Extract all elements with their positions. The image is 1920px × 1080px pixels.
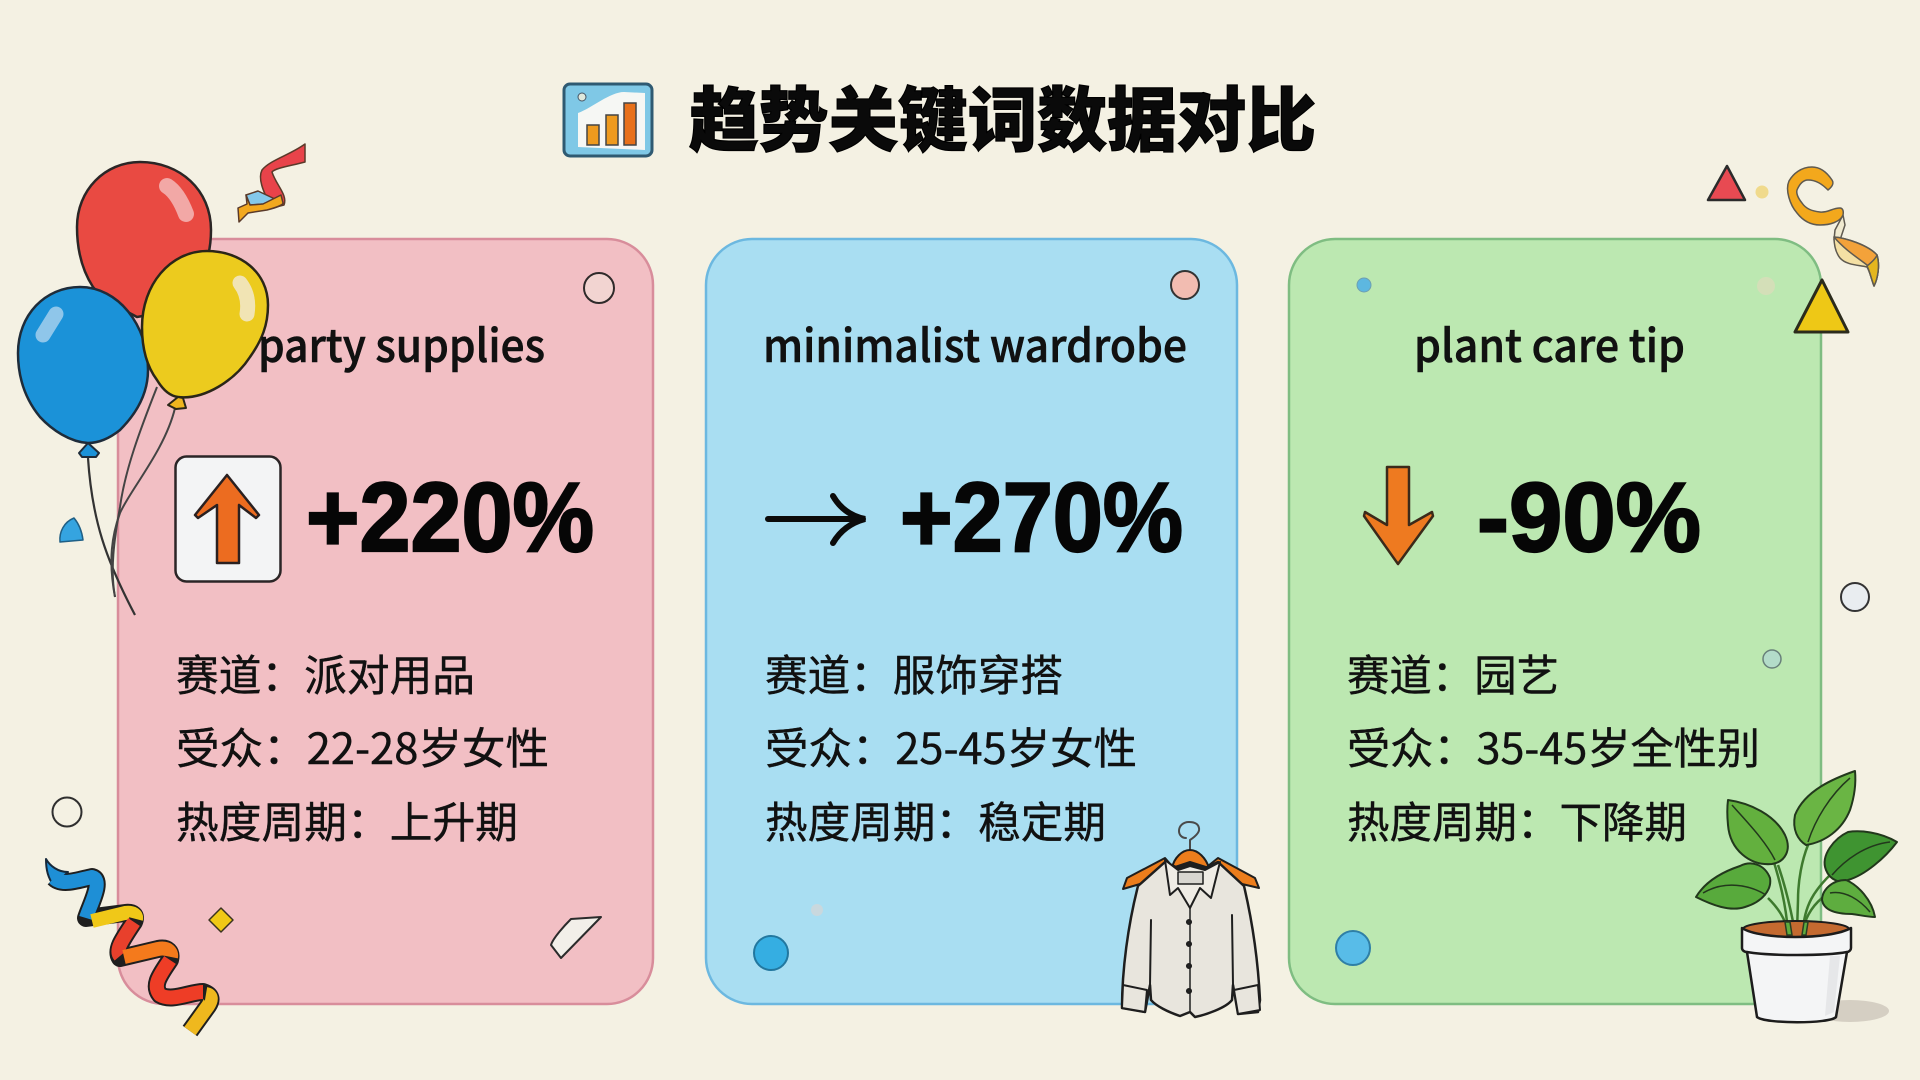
text block: details: 热度周期：上升期 [176, 789, 518, 851]
icon: pale yellow dot [1756, 186, 1768, 198]
icon: faint dot [1757, 277, 1775, 295]
icon: outline circle left [52, 798, 82, 826]
icon: corner circle [1171, 271, 1199, 299]
icon: pale teal dot [1763, 650, 1781, 668]
icon: small blue dot [1357, 278, 1371, 292]
text block: details: 赛道：派对用品 [176, 642, 475, 704]
icon: corner circle [584, 273, 614, 303]
icon: blue dot [1336, 931, 1370, 965]
icon: up arrow [176, 456, 280, 582]
stat: -90%: -90% [1477, 462, 1701, 572]
panel: minimalist wardrobe [706, 239, 1237, 1004]
icon: blue chip [60, 518, 83, 542]
text block: details: 赛道：园艺 [1347, 642, 1559, 704]
text block: details: 受众：22-28岁女性 [176, 715, 549, 777]
keyword: plant care tip [1414, 310, 1685, 375]
icon: top-left ribbon [238, 144, 305, 222]
icon: blue dot [754, 936, 788, 970]
text block: details: 受众：25-45岁女性 [765, 715, 1137, 777]
panel: party supplies [118, 239, 653, 1004]
panel: plant care tip [1289, 239, 1821, 1004]
stat: +270%: +270% [900, 462, 1183, 572]
text block: details [1347, 642, 1760, 851]
icon: red triangle [1708, 166, 1745, 200]
icon: faint dot [811, 904, 823, 916]
icon: right arrow [768, 496, 865, 543]
text block: details: 赛道：服饰穿搭 [765, 642, 1063, 704]
icon: bottom-left ribbon [46, 859, 211, 1031]
icon: yellow triangle [1795, 280, 1848, 332]
keyword: minimalist wardrobe [763, 310, 1187, 375]
illustration: shirt on hanger [1122, 822, 1260, 1017]
title: 趋势关键词数据对比 [689, 65, 1316, 166]
text block: details: 受众：35-45岁全性别 [1347, 715, 1760, 777]
icon: yellow diamond [209, 908, 233, 932]
icon: bar chart [564, 84, 652, 156]
icon: outline circle right [1841, 583, 1869, 611]
text block: details [176, 642, 549, 851]
stat: +220%: +220% [306, 462, 594, 572]
illustration: balloons [18, 162, 268, 615]
text block: details: 热度周期：稳定期 [765, 789, 1106, 851]
keyword: party supplies: party supplies [258, 310, 545, 375]
icon: paper chip [551, 917, 601, 958]
icon: down arrow [1364, 467, 1433, 564]
illustration: potted plant [1696, 771, 1897, 1022]
icon: top-right ribbon [1788, 167, 1878, 286]
text block: details: 热度周期：下降期 [1347, 789, 1687, 851]
text block: details [765, 642, 1137, 851]
